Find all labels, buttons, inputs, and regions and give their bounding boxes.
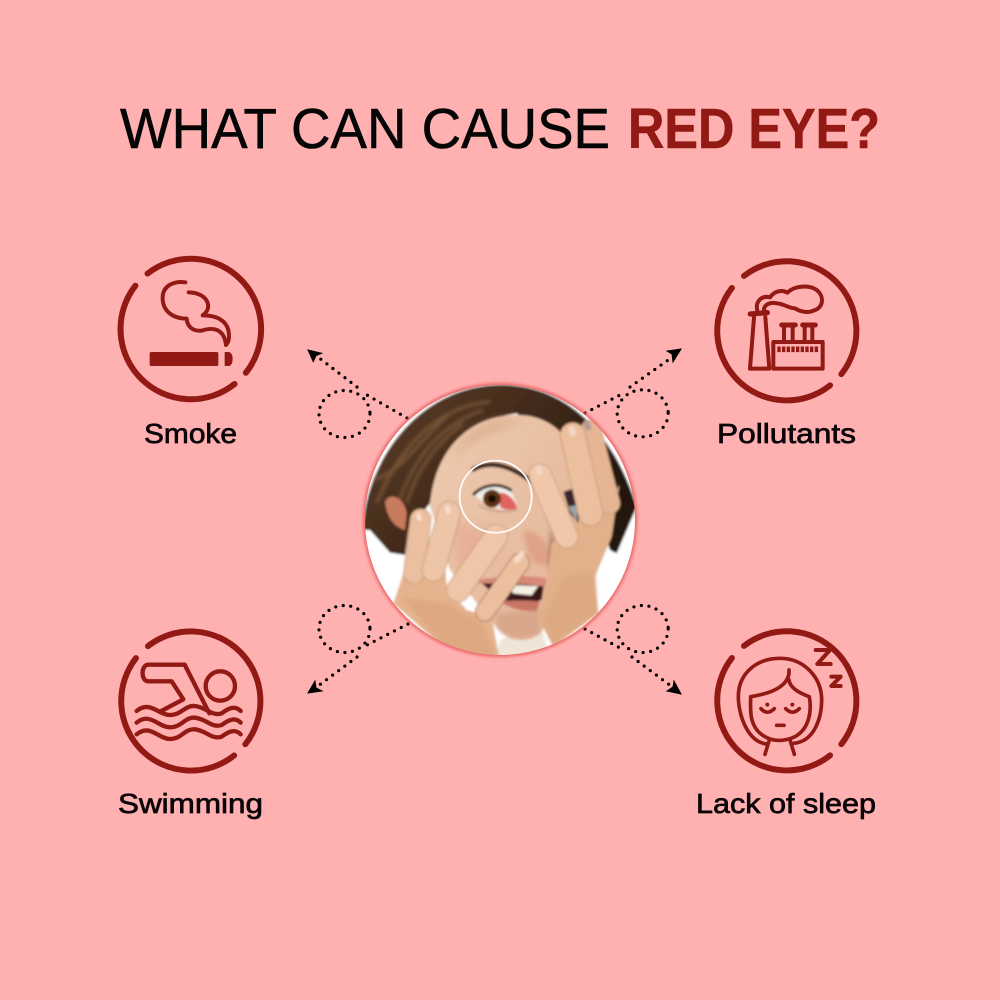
right hand xyxy=(538,485,619,647)
panel: lack of sleep xyxy=(696,631,876,819)
magnifier ring around the eye xyxy=(460,461,532,533)
label: Smoke: Smoke xyxy=(144,418,237,449)
left hand xyxy=(392,571,500,655)
icon: factory xyxy=(717,261,856,400)
arrow: to swimming xyxy=(308,606,408,693)
panel: swimming xyxy=(118,631,263,819)
title xyxy=(120,97,880,161)
icon: swimmer xyxy=(121,631,260,771)
label: Lack of sleep: Lack of sleep xyxy=(696,788,876,819)
arrow: to smoke xyxy=(308,350,407,438)
panel: smoke xyxy=(121,259,261,449)
panel: pollutants xyxy=(717,261,856,449)
nose xyxy=(523,530,549,565)
label: Swimming: Swimming xyxy=(118,788,263,819)
title: WHAT CAN CAUSE xyxy=(120,97,610,161)
eye xyxy=(475,487,518,510)
icon: cigarette and smoke xyxy=(121,259,261,399)
title: RED EYE? xyxy=(628,97,880,161)
arrow: to lack of sleep xyxy=(585,606,681,694)
icon: sleeping woman xyxy=(717,631,856,770)
arrow: to pollutants xyxy=(585,349,681,437)
hair xyxy=(363,385,637,555)
label: Pollutants: Pollutants xyxy=(717,418,856,449)
mouth xyxy=(482,582,545,603)
photo: woman covering her face with a red eye xyxy=(361,381,639,659)
face xyxy=(497,630,548,655)
